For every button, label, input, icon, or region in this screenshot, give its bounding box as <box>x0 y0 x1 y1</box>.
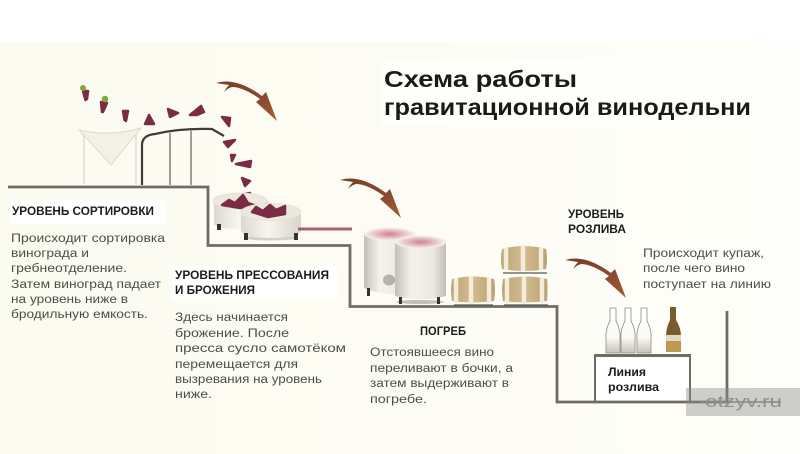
text: bottling level: УРОВЕНЬ <box>568 207 624 221</box>
text: bottling level: Происходит купаж, <box>643 248 764 260</box>
text: pressing level: ниже. <box>175 389 212 401</box>
watermark <box>686 388 800 416</box>
text: sorting level: бродильную емкость. <box>11 309 148 321</box>
text: pressing level: перемещается для <box>175 359 298 371</box>
text: pressing level: вызревания на уровень <box>175 374 322 386</box>
icon: press vat back <box>213 193 268 230</box>
text: cellar: Отстоявшееся вино <box>370 347 494 359</box>
icon: falling grapes <box>80 85 251 201</box>
text: bottling level: РОЗЛИВА <box>568 222 626 236</box>
text: bottling level: после чего вино <box>643 263 745 275</box>
text: pressing level: брожение. После <box>175 328 289 340</box>
title <box>384 66 751 120</box>
text: pressing level <box>175 268 346 401</box>
wine pipe <box>298 228 352 230</box>
arrow: to bottling <box>565 259 626 298</box>
icon: filled bottle <box>666 307 681 352</box>
right post <box>726 311 728 402</box>
text: bottling level: поступает на линию <box>643 279 771 291</box>
bottling line box <box>594 355 691 402</box>
text: sorting level: УРОВЕНЬ СОРТИРОВКИ <box>12 204 154 218</box>
text: sorting level: гребнеотделение. <box>11 263 127 275</box>
text: sorting level: на уровень ниже в <box>11 294 128 306</box>
text: cellar: переливают в бочки, а <box>370 363 514 375</box>
text: cellar: погребе. <box>370 394 427 406</box>
watermark: otzyv.ru <box>705 392 782 411</box>
text: cellar <box>370 324 514 406</box>
icon: barrel stacked top <box>501 245 547 273</box>
icon: press vat front <box>241 204 301 240</box>
text: bottling line label: Линия <box>608 365 646 379</box>
icon: barrel stacked bottom <box>502 276 548 305</box>
arrow: press to cellar <box>216 82 277 121</box>
icon: empty bottles <box>606 308 651 353</box>
title: гравитационной винодельни <box>384 94 751 120</box>
icon: sorting hopper <box>79 128 141 184</box>
arrow: to tanks <box>340 179 401 218</box>
text: bottling level <box>568 207 771 291</box>
text: bottling line label <box>608 365 659 394</box>
staircase line <box>8 187 730 402</box>
icon: large tank front <box>395 236 446 304</box>
text: pressing level: УРОВЕНЬ ПРЕССОВАНИЯ <box>175 268 329 282</box>
sorting table conveyor <box>142 129 224 185</box>
text: pressing level: И БРОЖЕНИЯ <box>175 283 255 297</box>
text: bottling line label: розлива <box>608 380 659 394</box>
text: sorting level: Происходит сортировка <box>11 233 166 245</box>
text: sorting level: Затем виноград падает <box>11 279 162 291</box>
text: cellar: ПОГРЕБ <box>420 324 466 338</box>
icon: large tank back <box>364 228 415 296</box>
text: pressing level: пресса сусло самотёком <box>175 343 346 355</box>
text: sorting level <box>11 204 166 321</box>
title: Схема работы <box>384 66 577 92</box>
text: pressing level: Здесь начинается <box>175 312 288 324</box>
icon: barrel bottom left <box>451 276 495 305</box>
text: sorting level: винограда и <box>11 248 89 260</box>
text: cellar: затем выдерживают в <box>370 378 509 390</box>
